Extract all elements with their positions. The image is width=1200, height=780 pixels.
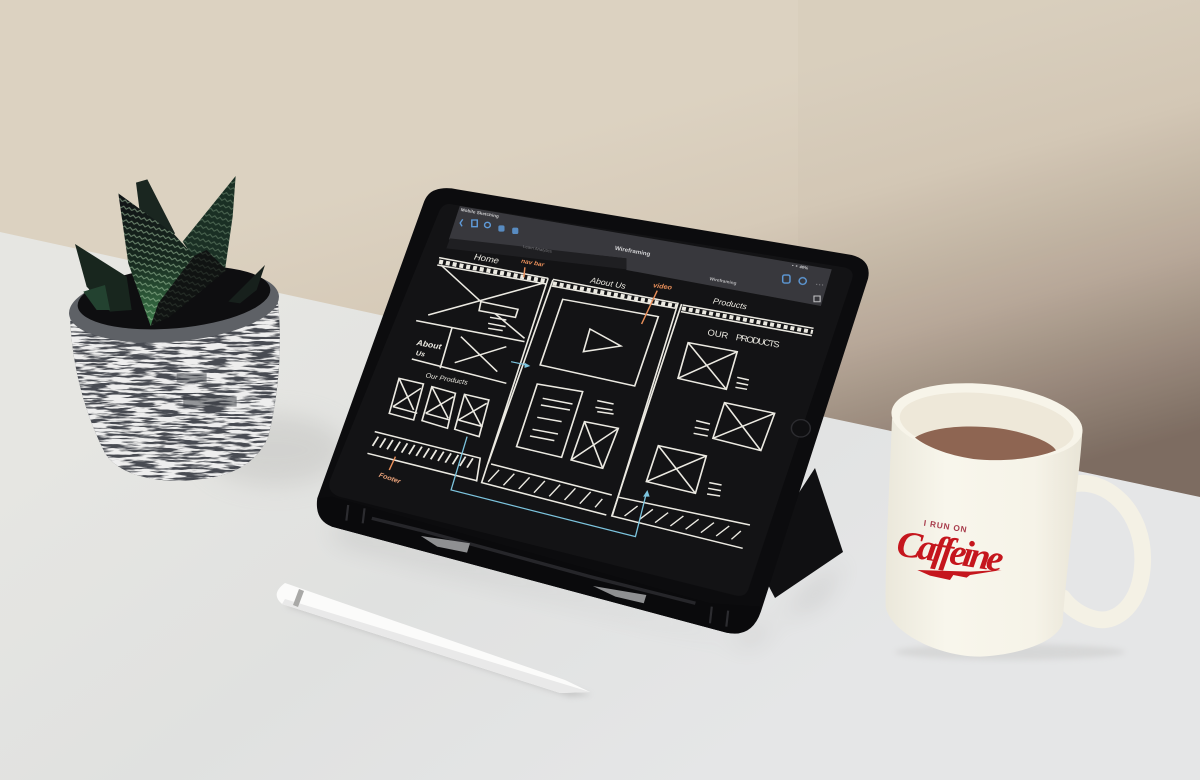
products frame <box>612 304 750 548</box>
app header text and icons: Wireframing <box>614 246 651 258</box>
coffee surface <box>915 427 1056 460</box>
handwritten labels: Us <box>415 350 426 359</box>
blue flow arrows <box>451 362 650 537</box>
tablet <box>317 188 869 634</box>
mug handle <box>1063 483 1143 620</box>
handwritten labels: About Us <box>589 275 628 291</box>
handwritten labels: Products <box>712 296 749 311</box>
orange annotations: video <box>653 283 673 292</box>
pencil band <box>293 589 304 607</box>
about nav band <box>552 286 675 308</box>
wall background <box>0 0 1200 520</box>
leaf: front main <box>118 193 227 326</box>
home button <box>791 420 810 437</box>
screen <box>329 204 853 596</box>
wireframe: products page <box>612 304 814 548</box>
leaf: back right <box>183 176 265 303</box>
home product cards <box>389 378 423 420</box>
home nav band <box>437 258 548 284</box>
pot rim <box>66 259 282 351</box>
product box three <box>646 446 706 493</box>
products nav band <box>681 305 814 336</box>
pot body with streaks <box>70 302 280 481</box>
mug body <box>886 418 1082 657</box>
app header text and icons: Wireframing <box>709 276 737 286</box>
wireframe: about page <box>482 278 678 515</box>
handwritten labels: OUR <box>707 327 730 341</box>
pencil holder strip <box>319 497 760 633</box>
app header text and icons: Learn Analytics <box>523 244 552 254</box>
handwritten labels <box>415 252 781 387</box>
app header text and icons: • ⚬ 40% <box>792 263 809 270</box>
apple pencil <box>277 583 590 693</box>
orange annotations: nav bar <box>520 258 545 269</box>
handwritten labels: About <box>415 337 444 351</box>
home hero image <box>428 265 543 338</box>
leaf: back left pair <box>75 179 175 312</box>
app header bar <box>449 206 832 306</box>
tablet stand cover <box>755 468 843 598</box>
products footer <box>625 506 741 539</box>
about frame <box>482 278 678 515</box>
document block <box>517 384 583 457</box>
app header text and icons: Mobile Sketching <box>460 207 500 219</box>
pot interior <box>75 259 273 337</box>
app header text and icons <box>460 207 823 302</box>
product box one <box>678 343 737 389</box>
grey case tab left <box>421 536 470 553</box>
home about image <box>455 337 506 372</box>
mug opening <box>888 375 1086 469</box>
home footer <box>367 432 481 482</box>
mug logo: I RUN ON <box>923 518 967 534</box>
wireframe: home page <box>367 258 548 482</box>
about image <box>571 422 618 468</box>
table surface <box>0 232 1200 780</box>
product box two <box>713 403 775 451</box>
video box <box>540 299 658 386</box>
mug logo: Caffeine <box>894 523 1006 581</box>
handwritten labels: PRODUCTS <box>735 332 781 350</box>
table shadows <box>205 415 1125 697</box>
handwritten labels: Home <box>473 252 500 266</box>
case body <box>317 188 869 634</box>
coffee mug <box>886 375 1143 657</box>
handwritten labels: Our Products <box>425 373 469 387</box>
orange annotations: Footer <box>378 472 403 486</box>
about footer <box>491 464 612 495</box>
grey case tab right <box>593 586 646 603</box>
plant in ceramic pot <box>60 176 290 487</box>
orange annotations <box>378 258 673 486</box>
tab row <box>446 238 626 269</box>
